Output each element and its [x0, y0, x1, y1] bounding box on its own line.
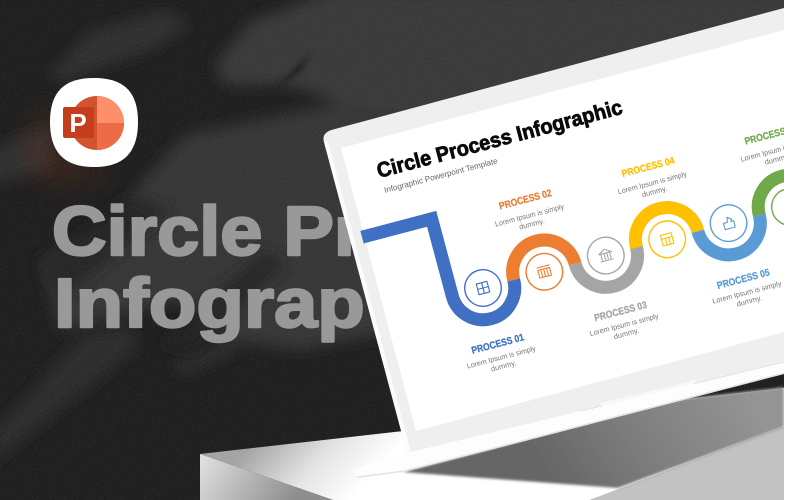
step 6: green arc [735, 121, 800, 234]
step 3: gray arc [567, 229, 662, 347]
icon: PowerPoint logo [50, 78, 138, 167]
heading: large title: Infographic [54, 264, 477, 342]
pedestal [200, 387, 784, 500]
step 3: gray arc: dummy. [613, 326, 640, 341]
step 3: gray arc: PROCESS 03 [593, 300, 649, 324]
step 2: orange arc: dummy. [518, 216, 545, 232]
right margin strip [784, 0, 800, 500]
icon: PowerPoint logo: P [69, 108, 87, 138]
step 4: yellow arc: Lorem Ipsum is simply [617, 169, 688, 196]
step 2: orange arc: PROCESS 02 [498, 188, 553, 212]
heading: large title [54, 203, 363, 344]
step 1: blue lead-in and arc [362, 202, 539, 397]
step 5: light blue arc: dummy. [735, 293, 763, 309]
slide subtitle: Infographic Powerpoint Template [383, 156, 499, 195]
step 2: orange arc: Lorem Ipsum is simply [494, 202, 565, 229]
step 1: blue lead-in and arc: dummy. [490, 358, 517, 374]
step 3: gray arc: Lorem Ipsum is simply [589, 311, 660, 338]
step 5: light blue arc [690, 196, 785, 314]
step 1: blue lead-in and arc: PROCESS 01 [470, 332, 526, 357]
slide title: Circle Process Infographic [374, 96, 625, 183]
step 5: light blue arc: Lorem Ipsum is simply [711, 279, 783, 306]
step 2: orange arc [490, 186, 584, 299]
step 4: yellow arc: dummy. [641, 184, 668, 199]
heading: large title: Circle Process [52, 192, 578, 270]
step 6: green arc: dummy. [764, 151, 791, 167]
step 4: yellow arc: PROCESS 04 [621, 155, 676, 180]
step 1: blue lead-in and arc: Lorem Ipsum is simply [466, 344, 537, 371]
step 4: yellow arc [613, 153, 706, 266]
process timeline [362, 120, 800, 397]
step 5: light blue arc: PROCESS 05 [716, 267, 771, 292]
laptop [323, 8, 784, 478]
